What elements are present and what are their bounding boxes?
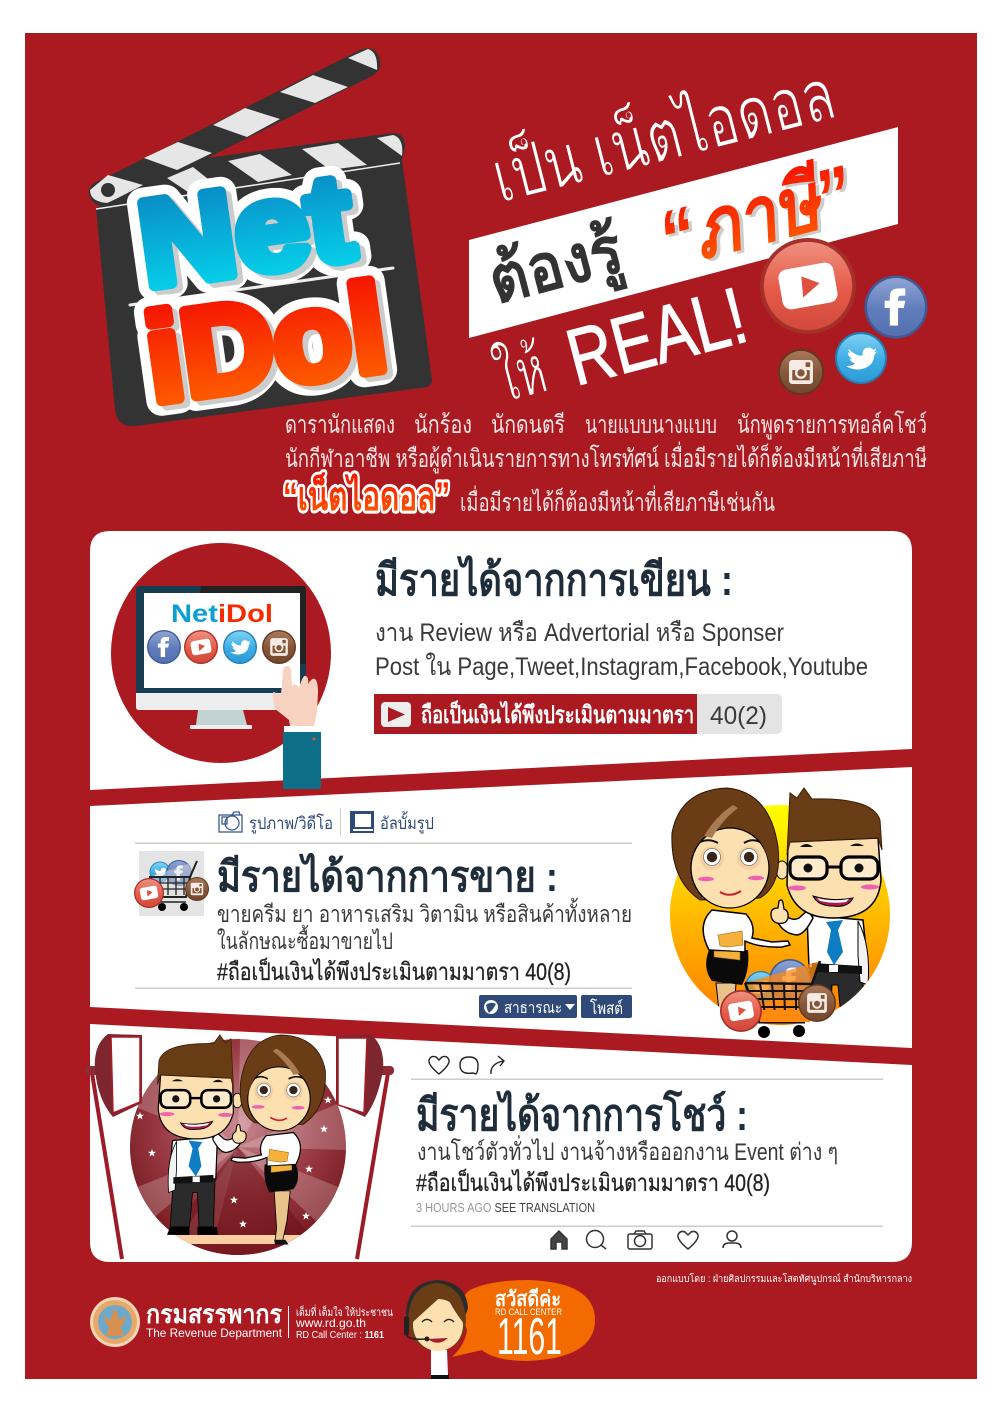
- icon: camera tab: [219, 812, 242, 832]
- panel body: งานโชว์ตัวทั่วไป งานจ้างหรือออกงาน Event ต่าง ๆ: [417, 1135, 838, 1166]
- clapper board body: [96, 133, 432, 426]
- cart: [720, 959, 836, 1038]
- icon: youtube: [760, 238, 856, 334]
- call center agent: [404, 1280, 468, 1379]
- headline: [469, 52, 898, 418]
- white slanted band: [469, 127, 898, 338]
- button: public: [479, 995, 577, 1018]
- footer: revenue department: [90, 1297, 393, 1347]
- bottom nav icons: [551, 1230, 741, 1249]
- tax clause bar: [374, 694, 782, 734]
- album tab: อัลบั้มรูป: [380, 811, 434, 834]
- clause label: ถือเป็นเงินได้พึงประเมินตามมาตรา: [421, 700, 694, 729]
- logo word Net: Net: [131, 148, 361, 313]
- post time: 3 HOURS AGO SEE TRANSLATION: [416, 1200, 595, 1215]
- intro line 3: เมื่อมีรายได้ก็ต้องมีหน้าที่เสียภาษีเช่นกัน: [460, 485, 775, 517]
- icon: facebook: [864, 276, 928, 338]
- tabs row: [219, 808, 434, 836]
- headline line 3: Thai word: ให้: [486, 330, 554, 418]
- slogan: เต็มที่ เต็มใจ ให้ประชาชน: [296, 1304, 393, 1319]
- tax clause: #ถือเป็นเงินได้พึงประเมินตามมาตรา 40(8): [416, 1168, 770, 1197]
- department name english: The Revenue Department: [146, 1326, 283, 1340]
- phone number: 1161: [497, 1308, 562, 1366]
- call center speech bubble: [452, 1280, 595, 1366]
- performers: [157, 1035, 326, 1244]
- headline line 2: ต้องรู้: [481, 212, 631, 322]
- screen logo: Net iDol: [171, 600, 273, 628]
- intro keyword: net idol: “เน็ตไอดอล”: [283, 471, 450, 519]
- greeting: สวัสดีค่ะ: [495, 1287, 561, 1311]
- stars: [136, 1096, 332, 1228]
- icon: play: [381, 702, 411, 727]
- left spotlight: [85, 1034, 142, 1259]
- intro line 1: นักพูดรายการทอล์คโชว์: [737, 410, 927, 440]
- photo video tab: รูปภาพ/วิดีโอ: [249, 813, 333, 834]
- website: www.rd.go.th: [295, 1316, 366, 1330]
- logo word Net: Net: [136, 153, 366, 317]
- icon: twitter: [835, 332, 887, 384]
- panel heading: มีรายได้จากการขาย :: [217, 852, 558, 900]
- icon: instagram: [778, 349, 824, 395]
- button: post: โพสต์: [590, 998, 623, 1018]
- panel body line 1: ขายครีม ยา อาหารเสริม วิตามิน หรือสินค้าทั้งหลาย: [217, 898, 632, 927]
- clapper stripes: [128, 135, 402, 203]
- logo word iDol: iDol: [138, 259, 394, 429]
- button: post: [581, 995, 632, 1018]
- panel body line 2: ในลักษณะซื้อมาขายไป: [217, 925, 393, 954]
- clapper top arm: [89, 48, 380, 206]
- headline line 3: REAL: REAL!: [558, 270, 755, 402]
- thumbnail: shopping cart: [134, 851, 209, 916]
- panel: income from writing: [90, 531, 912, 790]
- bubble label: RD CALL CENTER: [495, 1307, 562, 1317]
- button: public: สาธารณะ: [504, 1000, 562, 1017]
- intro line 1: นักร้อง: [414, 411, 472, 439]
- hand and sleeve: [273, 666, 321, 789]
- intro text: [283, 410, 927, 519]
- right spotlight: [336, 1034, 394, 1259]
- intro line 1: นักดนตรี: [491, 411, 565, 439]
- clapperboard logo: Net iDol: [89, 48, 432, 434]
- intro line 1: [285, 410, 927, 440]
- panel: income from selling: [90, 767, 912, 1050]
- tax clause: #ถือเป็นเงินได้พึงประเมินตามมาตรา 40(8): [217, 957, 571, 986]
- intro line 1: ดารานักแสดง: [285, 411, 395, 439]
- headline keyword: tax: “ภาษี”: [650, 149, 861, 284]
- screen icons: [147, 630, 296, 664]
- post action icons: [429, 1056, 504, 1074]
- intro keyword: net idol: “เน็ตไอดอล”: [283, 471, 450, 519]
- logo word iDol: iDol: [138, 259, 394, 429]
- clause number: 40(2): [710, 702, 767, 730]
- call center: RD Call Center : 1161: [296, 1330, 384, 1341]
- illustration: monitor and hand: [111, 543, 331, 789]
- headline keyword: tax: “ภาษี”: [653, 151, 865, 287]
- stage circle: [130, 1039, 346, 1256]
- designer credit: ออกแบบโดย : ฝ่ายศิลปกรรมและโสตทัศนูปกรณ์ สำนักบริหารกลาง: [656, 1272, 912, 1285]
- panel heading: มีรายได้จากการเขียน :: [375, 554, 733, 605]
- social media icons: [760, 238, 928, 395]
- intro keyword: net idol: [283, 471, 450, 519]
- panel: income from shows: [85, 1024, 912, 1262]
- logo word iDol: iDol: [143, 263, 400, 433]
- logo word Net: Net: [131, 148, 361, 313]
- panel heading: มีรายได้จากการโชว์ :: [416, 1088, 748, 1140]
- panel body line 2: Post ใน Page,Tweet,Instagram,Facebook,Youtube: [375, 652, 868, 681]
- department name thai: กรมสรรพากร: [146, 1299, 282, 1329]
- illustration: stage performers: [85, 1034, 394, 1259]
- panel body line 1: งาน Review หรือ Advertorial หรือ Sponser: [375, 619, 784, 647]
- intro line 1: นายแบบนางแบบ: [585, 411, 717, 439]
- seal: [90, 1297, 140, 1347]
- icon: album tab: [350, 811, 374, 833]
- headline line 1: เป็น เน็ตไอดอล: [483, 52, 843, 219]
- illustration: sellers with cart: [670, 788, 890, 1050]
